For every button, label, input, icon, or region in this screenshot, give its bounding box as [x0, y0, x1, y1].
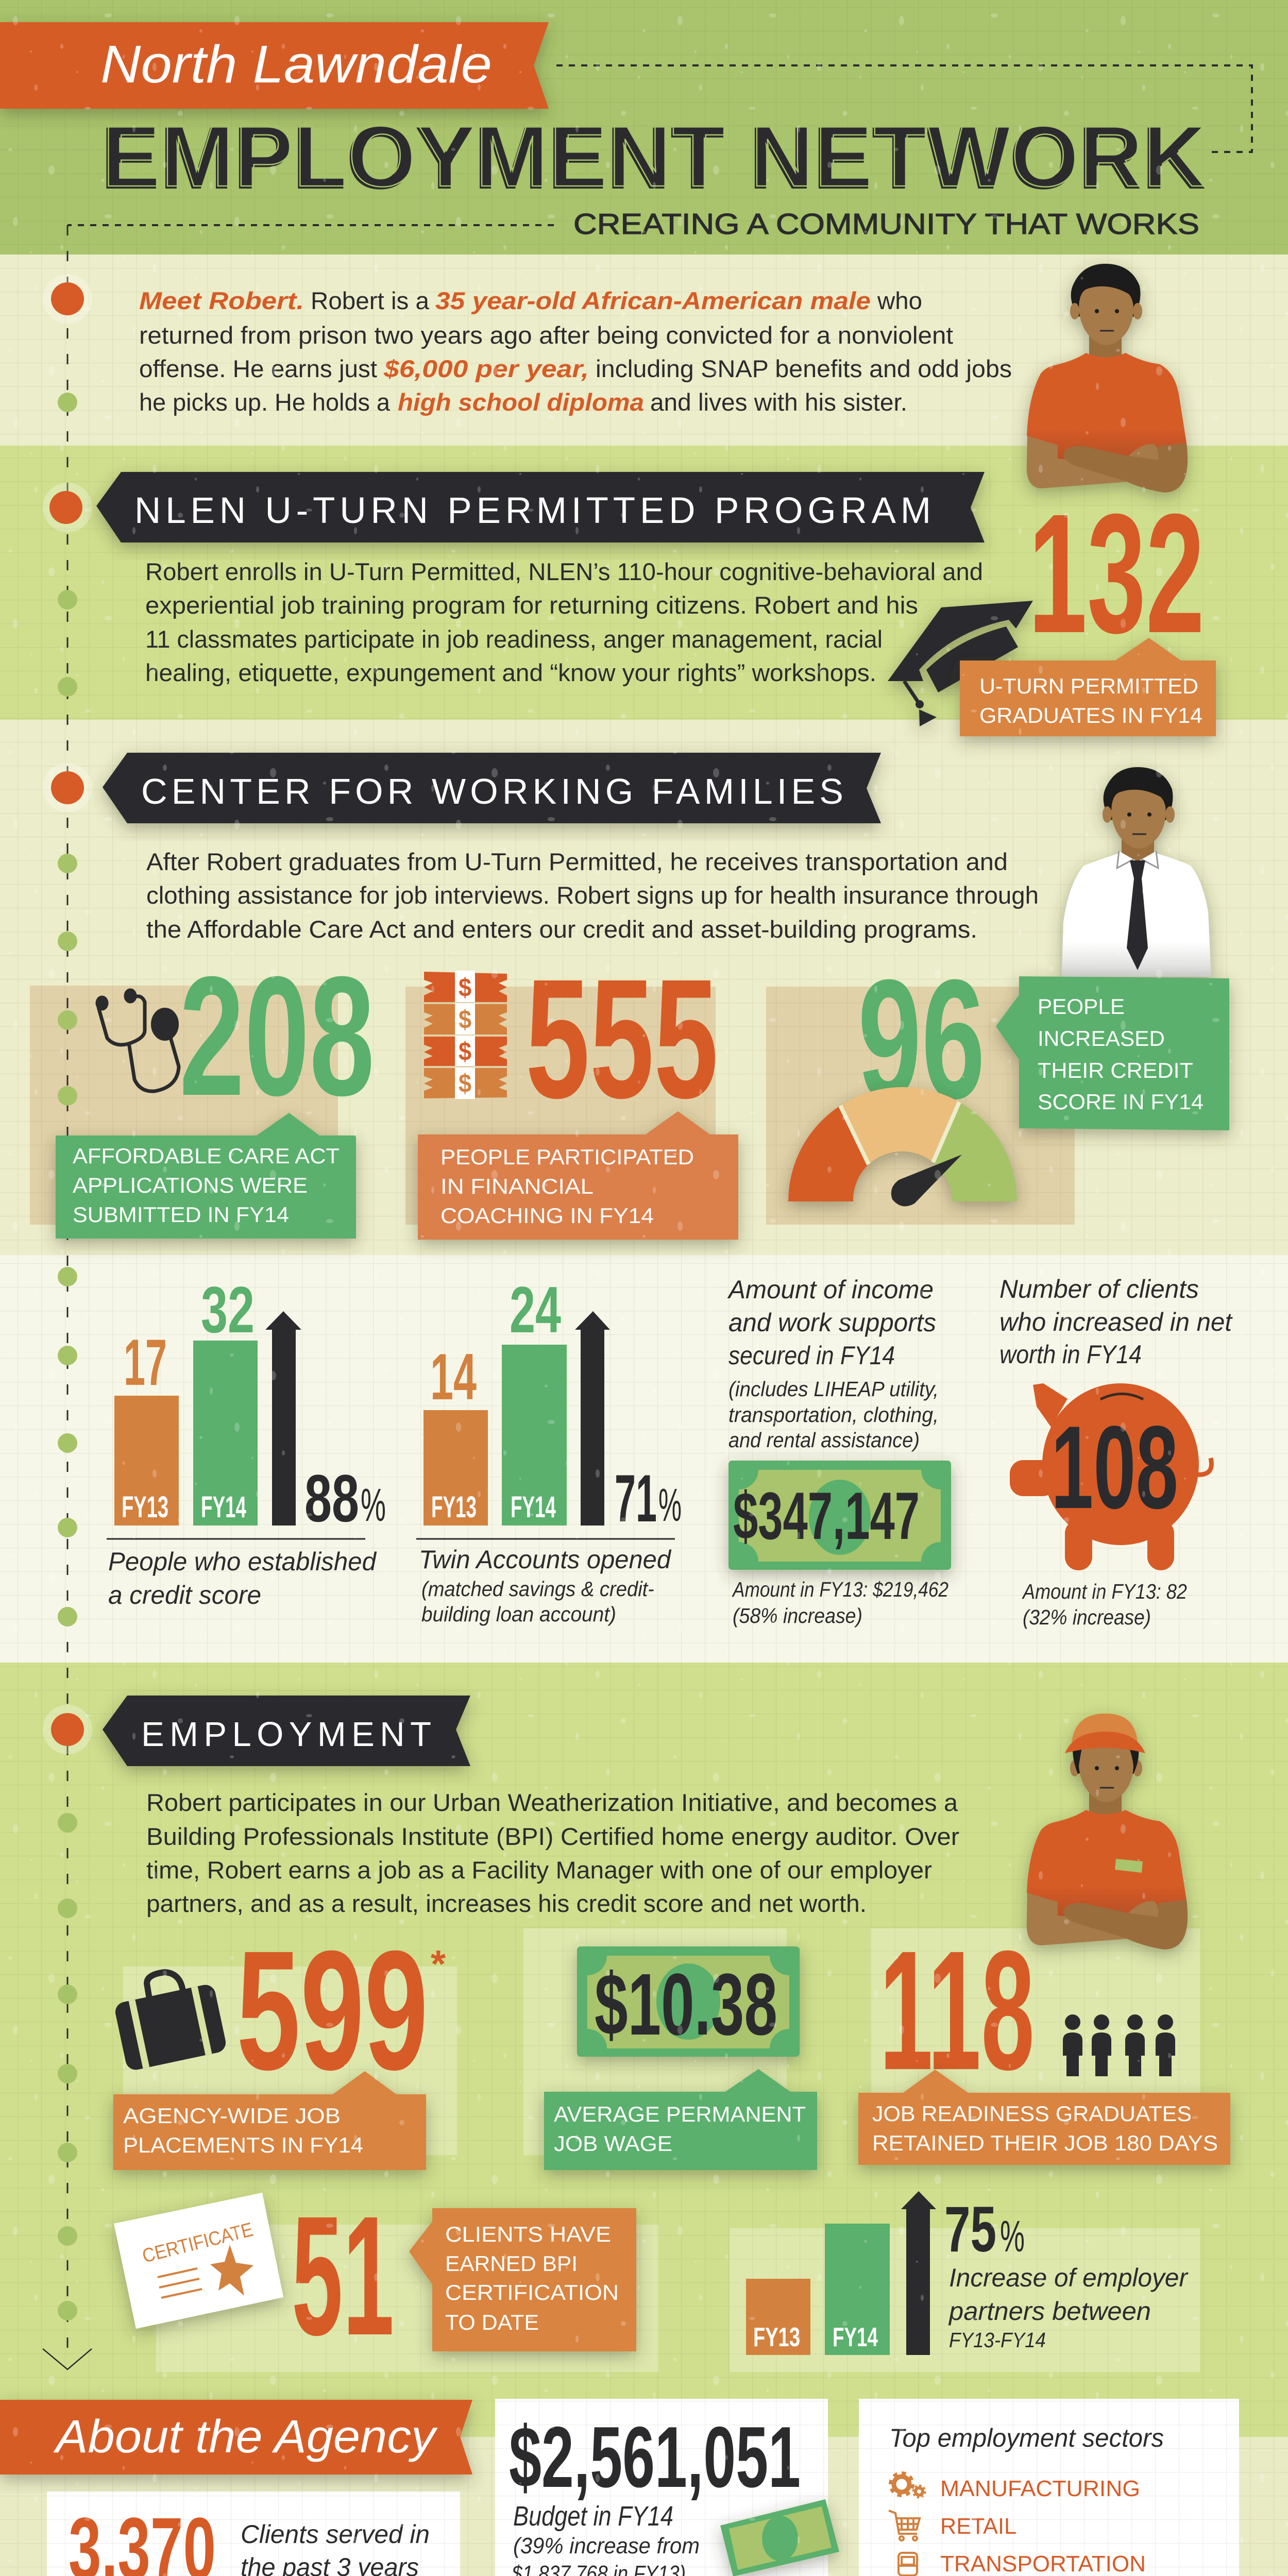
title banner [0, 22, 549, 109]
intro text block [139, 287, 1012, 416]
banner: Employment [103, 1696, 470, 1766]
banner: NLEN U-Turn Permitted Program: NLEN U-TURN PERMITTED PROGRAM [134, 490, 931, 531]
callout: AGENCY-WIDE JOB [123, 2104, 341, 2128]
callout: SUBMITTED IN FY14 [73, 1202, 289, 1227]
stat: net worth piggy bank: who increased in net [999, 1308, 1233, 1336]
chart: employer partner bars: FY13-FY14 [949, 2328, 1046, 2352]
callout: COACHING IN FY14 [440, 1204, 654, 1228]
stat: 599 job placements: 599 [236, 1915, 428, 2105]
chart: twin account bars: (matched savings & credit- [421, 1577, 654, 1601]
chart: twin account bars: % [658, 1480, 682, 1531]
callout: THEIR CREDIT [1038, 1058, 1193, 1082]
stat: 51 BPI certifications [114, 2180, 636, 2370]
figure: Robert in white shirt and tie [1062, 767, 1211, 977]
Employment text block [146, 1789, 959, 1917]
icon: shopping cart [889, 2511, 920, 2540]
callout: AVERAGE PERMANENT [554, 2102, 806, 2126]
banner: Center for Working Families: CENTER FOR WORKING FAMILIES [141, 771, 843, 811]
intro text block: Meet Robert. [139, 287, 304, 314]
icon: money stacks: $ [459, 973, 471, 1002]
U-Turn text block: experiential job training program for returning citizens. Robert and his [145, 591, 918, 619]
icon: gears [891, 2473, 925, 2497]
icon: certificate [114, 2193, 283, 2329]
icon: dollar bill [728, 1461, 951, 1570]
icon: credit score gauge [788, 1087, 1017, 1206]
stat: income and work supports: $347,147 [733, 1478, 920, 1553]
Employment text block: time, Robert earns a job as a Facility Manager with one of our employer [146, 1856, 932, 1884]
U-Turn text block: healing, etiquette, expungement and “know your rights” workshops. [145, 659, 876, 686]
icon: dollar bill [577, 1946, 800, 2057]
chart: twin account bars: FY14 [511, 1490, 556, 1524]
Employment text block: partners, and as a result, increases his credit score and net worth. [146, 1890, 867, 1917]
stat: 51 BPI certifications: 51 [292, 2180, 394, 2370]
panel: budget [509, 2409, 839, 2576]
icon: bus [899, 2553, 917, 2576]
callout: PEOPLE [1038, 994, 1125, 1019]
stat: income and work supports: secured in FY14 [728, 1341, 895, 1370]
callout [418, 1111, 738, 1240]
stat: income and work supports [727, 1275, 951, 1628]
callout: GRADUATES IN FY14 [979, 703, 1202, 727]
callout: JOB READINESS GRADUATES [872, 2102, 1192, 2126]
intro text block: Robert is a [311, 287, 430, 314]
icon: four people [1063, 2014, 1175, 2076]
chart: credit score bars: a credit score [108, 1581, 261, 1609]
stat: net worth piggy bank: 108 [1051, 1401, 1178, 1533]
icon: money stacks: $ [459, 1005, 471, 1034]
chart: twin account bars: 14 [430, 1340, 477, 1413]
chart: employer partner bars: % [1000, 2212, 1025, 2261]
U-Turn text block: 11 classmates participate in job readiness, anger management, racial [145, 625, 883, 653]
icon: briefcase [113, 1972, 228, 2072]
stat: 208 applications: 208 [179, 941, 375, 1131]
panel: top employment sectors: MANUFACTURING [940, 2476, 1140, 2501]
intro text block: who [877, 287, 922, 314]
chart: employer partner bars: FY14 [833, 2323, 878, 2352]
callout [996, 976, 1229, 1130]
chart: twin account bars: building loan account) [421, 1602, 616, 1626]
icon: money stacks [424, 971, 507, 1099]
stat: 96 credit score [788, 944, 1229, 1206]
chart: twin account bars: 24 [510, 1273, 561, 1346]
stat: net worth piggy bank [999, 1275, 1233, 1629]
chart: credit score bars: FY13 [122, 1490, 168, 1524]
callout: EARNED BPI [445, 2251, 578, 2276]
figure: Robert in orange shirt [1027, 264, 1188, 493]
stat: 555 financial coaching: 555 [526, 943, 718, 1133]
title: employment network: EMPLOYMENT NETWORK [100, 109, 1206, 208]
Employment text block: Robert participates in our Urban Weatherization Initiative, and becomes a [146, 1789, 958, 1816]
intro text block: and lives with his sister. [650, 388, 907, 416]
icon: stethoscope [97, 990, 179, 1091]
chart: credit score bars: 32 [201, 1273, 255, 1346]
panel: top employment sectors [889, 2424, 1164, 2576]
chart: twin account bars: FY13 [431, 1490, 477, 1524]
panel: budget: (39% increase from [513, 2533, 700, 2558]
icon: money stacks: $ [459, 1069, 471, 1098]
U-Turn text block: Robert enrolls in U-Turn Permitted, NLEN’s 110-hour cognitive-behavioral and [145, 558, 983, 585]
stat: net worth piggy bank: worth in FY14 [999, 1340, 1142, 1369]
callout [113, 2071, 426, 2170]
chart: credit score bars: 88 [304, 1461, 359, 1536]
stat: 118 job retention: 118 [879, 1915, 1035, 2105]
Center text block: After Robert graduates from U-Turn Permitted, he receives transportation and [146, 848, 1008, 875]
callout: PLACEMENTS IN FY14 [123, 2133, 363, 2157]
chart: credit score bars: % [361, 1480, 386, 1531]
chart: employer partner bars: FY13 [753, 2323, 800, 2352]
intro text block: returned from prison two years ago after being convicted for a nonviolent [139, 321, 953, 349]
callout: INCREASED [1038, 1026, 1165, 1050]
stat: $10.38 wage: $10.38 [595, 1956, 777, 2054]
callout: PEOPLE PARTICIPATED [440, 1145, 694, 1169]
stat: income and work supports: transportation, clothing, [728, 1403, 939, 1427]
chart: credit score bars: FY14 [201, 1490, 246, 1524]
chart: credit score bars: People who established [108, 1547, 377, 1576]
stat: $10.38 wage [544, 1946, 817, 2170]
chart: employer partner bars: partners between [948, 2297, 1151, 2326]
callout [960, 638, 1216, 736]
banner: NLEN U-Turn Permitted Program [96, 472, 985, 543]
banner: About the Agency: About the Agency [53, 2411, 438, 2463]
panel: budget: Budget in FY14 [513, 2501, 673, 2532]
U-Turn text block [145, 558, 983, 686]
chart: credit score bars [107, 1273, 386, 1609]
panel: top employment sectors: RETAIL [940, 2514, 1016, 2539]
callout: U-TURN PERMITTED [979, 674, 1198, 698]
intro text block: offense. He earns just [139, 355, 377, 382]
banner: About the Agency [0, 2400, 472, 2475]
Center text block [146, 848, 1039, 943]
stat: income and work supports: and rental assistance) [728, 1428, 920, 1452]
stat: 96 credit score: 96 [858, 944, 985, 1134]
intro text block: $6,000 per year, [383, 355, 589, 382]
subtitle: CREATING A COMMUNITY THAT WORKS [573, 208, 1199, 241]
stat: 208 applications [56, 941, 375, 1239]
chart: twin account bars: 71 [615, 1461, 657, 1536]
intro text block: high school diploma [398, 388, 644, 416]
chart: employer partner bars: Increase of employer [949, 2263, 1189, 2292]
panel: top employment sectors: TRANSPORTATION [940, 2551, 1146, 2576]
icon: tilted dollar bill [720, 2499, 839, 2576]
callout: JOB WAGE [554, 2131, 672, 2156]
panel: budget: $2,561,051 [509, 2409, 801, 2505]
chart: credit score bars: 17 [124, 1326, 167, 1399]
icon: graduation cap [888, 601, 1033, 726]
stat: 599 job placements [113, 1915, 446, 2170]
stat: net worth piggy bank: Number of clients [999, 1275, 1199, 1303]
icon: piggy bank [1010, 1383, 1211, 1570]
intro text block: 35 year-old African-American male [435, 287, 871, 314]
icon: money stacks: $ [459, 1037, 471, 1066]
title: employment network: EMPLOYMENT NETWORK [103, 106, 1208, 205]
callout [56, 1113, 356, 1239]
stat: net worth piggy bank: (32% increase) [1023, 1605, 1151, 1629]
stat: income and work supports: Amount in FY13: $219,462 [731, 1578, 948, 1601]
callout [544, 2069, 817, 2170]
stat: income and work supports: (includes LIHEAP utility, [728, 1377, 939, 1401]
callout: CLIENTS HAVE [445, 2222, 611, 2246]
chart: twin account bars [416, 1273, 682, 1626]
callout: APPLICATIONS WERE [73, 1173, 308, 1197]
panel: top employment sectors: Top employment sectors [889, 2424, 1164, 2452]
Employment text block: Building Professionals Institute (BPI) Certified home energy auditor. Over [146, 1823, 959, 1850]
stat: 118 job retention [858, 1915, 1230, 2165]
banner: Employment: EMPLOYMENT [141, 1715, 431, 1754]
callout: AFFORDABLE CARE ACT [73, 1144, 340, 1168]
chart: twin account bars: Twin Accounts opened [419, 1545, 672, 1574]
stat: income and work supports: and work supports [728, 1308, 936, 1337]
stat: 555 financial coaching [418, 943, 738, 1240]
figure: Robert in work uniform and hard hat [1027, 1714, 1188, 1950]
backing panels [30, 986, 1239, 2576]
panel: clients served [69, 2500, 430, 2576]
callout: SCORE IN FY14 [1038, 1090, 1204, 1114]
stat: 599 job placements: * [431, 1942, 446, 1986]
banner: Center for Working Families [103, 753, 881, 823]
callout [409, 2208, 636, 2351]
stat: income and work supports: (58% increase) [733, 1604, 862, 1628]
stat: 132 graduates [888, 478, 1216, 736]
callout [858, 2070, 1230, 2165]
callout: IN FINANCIAL [440, 1174, 594, 1198]
Center text block: clothing assistance for job interviews. Robert signs up for health insurance through [146, 882, 1039, 909]
title banner: North Lawndale [100, 35, 492, 94]
Center text block: the Affordable Care Act and enters our credit and asset-building programs. [146, 916, 977, 943]
intro text block: including SNAP benefits and odd jobs [596, 355, 1012, 382]
panel: clients served: Clients served in [241, 2520, 430, 2549]
chart: employer partner bars: 75 [944, 2194, 996, 2265]
callout: CERTIFICATION [445, 2280, 619, 2304]
callout: RETAINED THEIR JOB 180 DAYS [872, 2131, 1218, 2155]
callout: TO DATE [445, 2310, 539, 2334]
stat: net worth piggy bank: Amount in FY13: 82 [1021, 1580, 1187, 1603]
intro text block: he picks up. He holds a [139, 388, 391, 416]
chart: employer partner bars [746, 2191, 1189, 2355]
stat: income and work supports: Amount of income [727, 1275, 934, 1304]
icon: certificate: CERTIFICATE [140, 2219, 256, 2267]
